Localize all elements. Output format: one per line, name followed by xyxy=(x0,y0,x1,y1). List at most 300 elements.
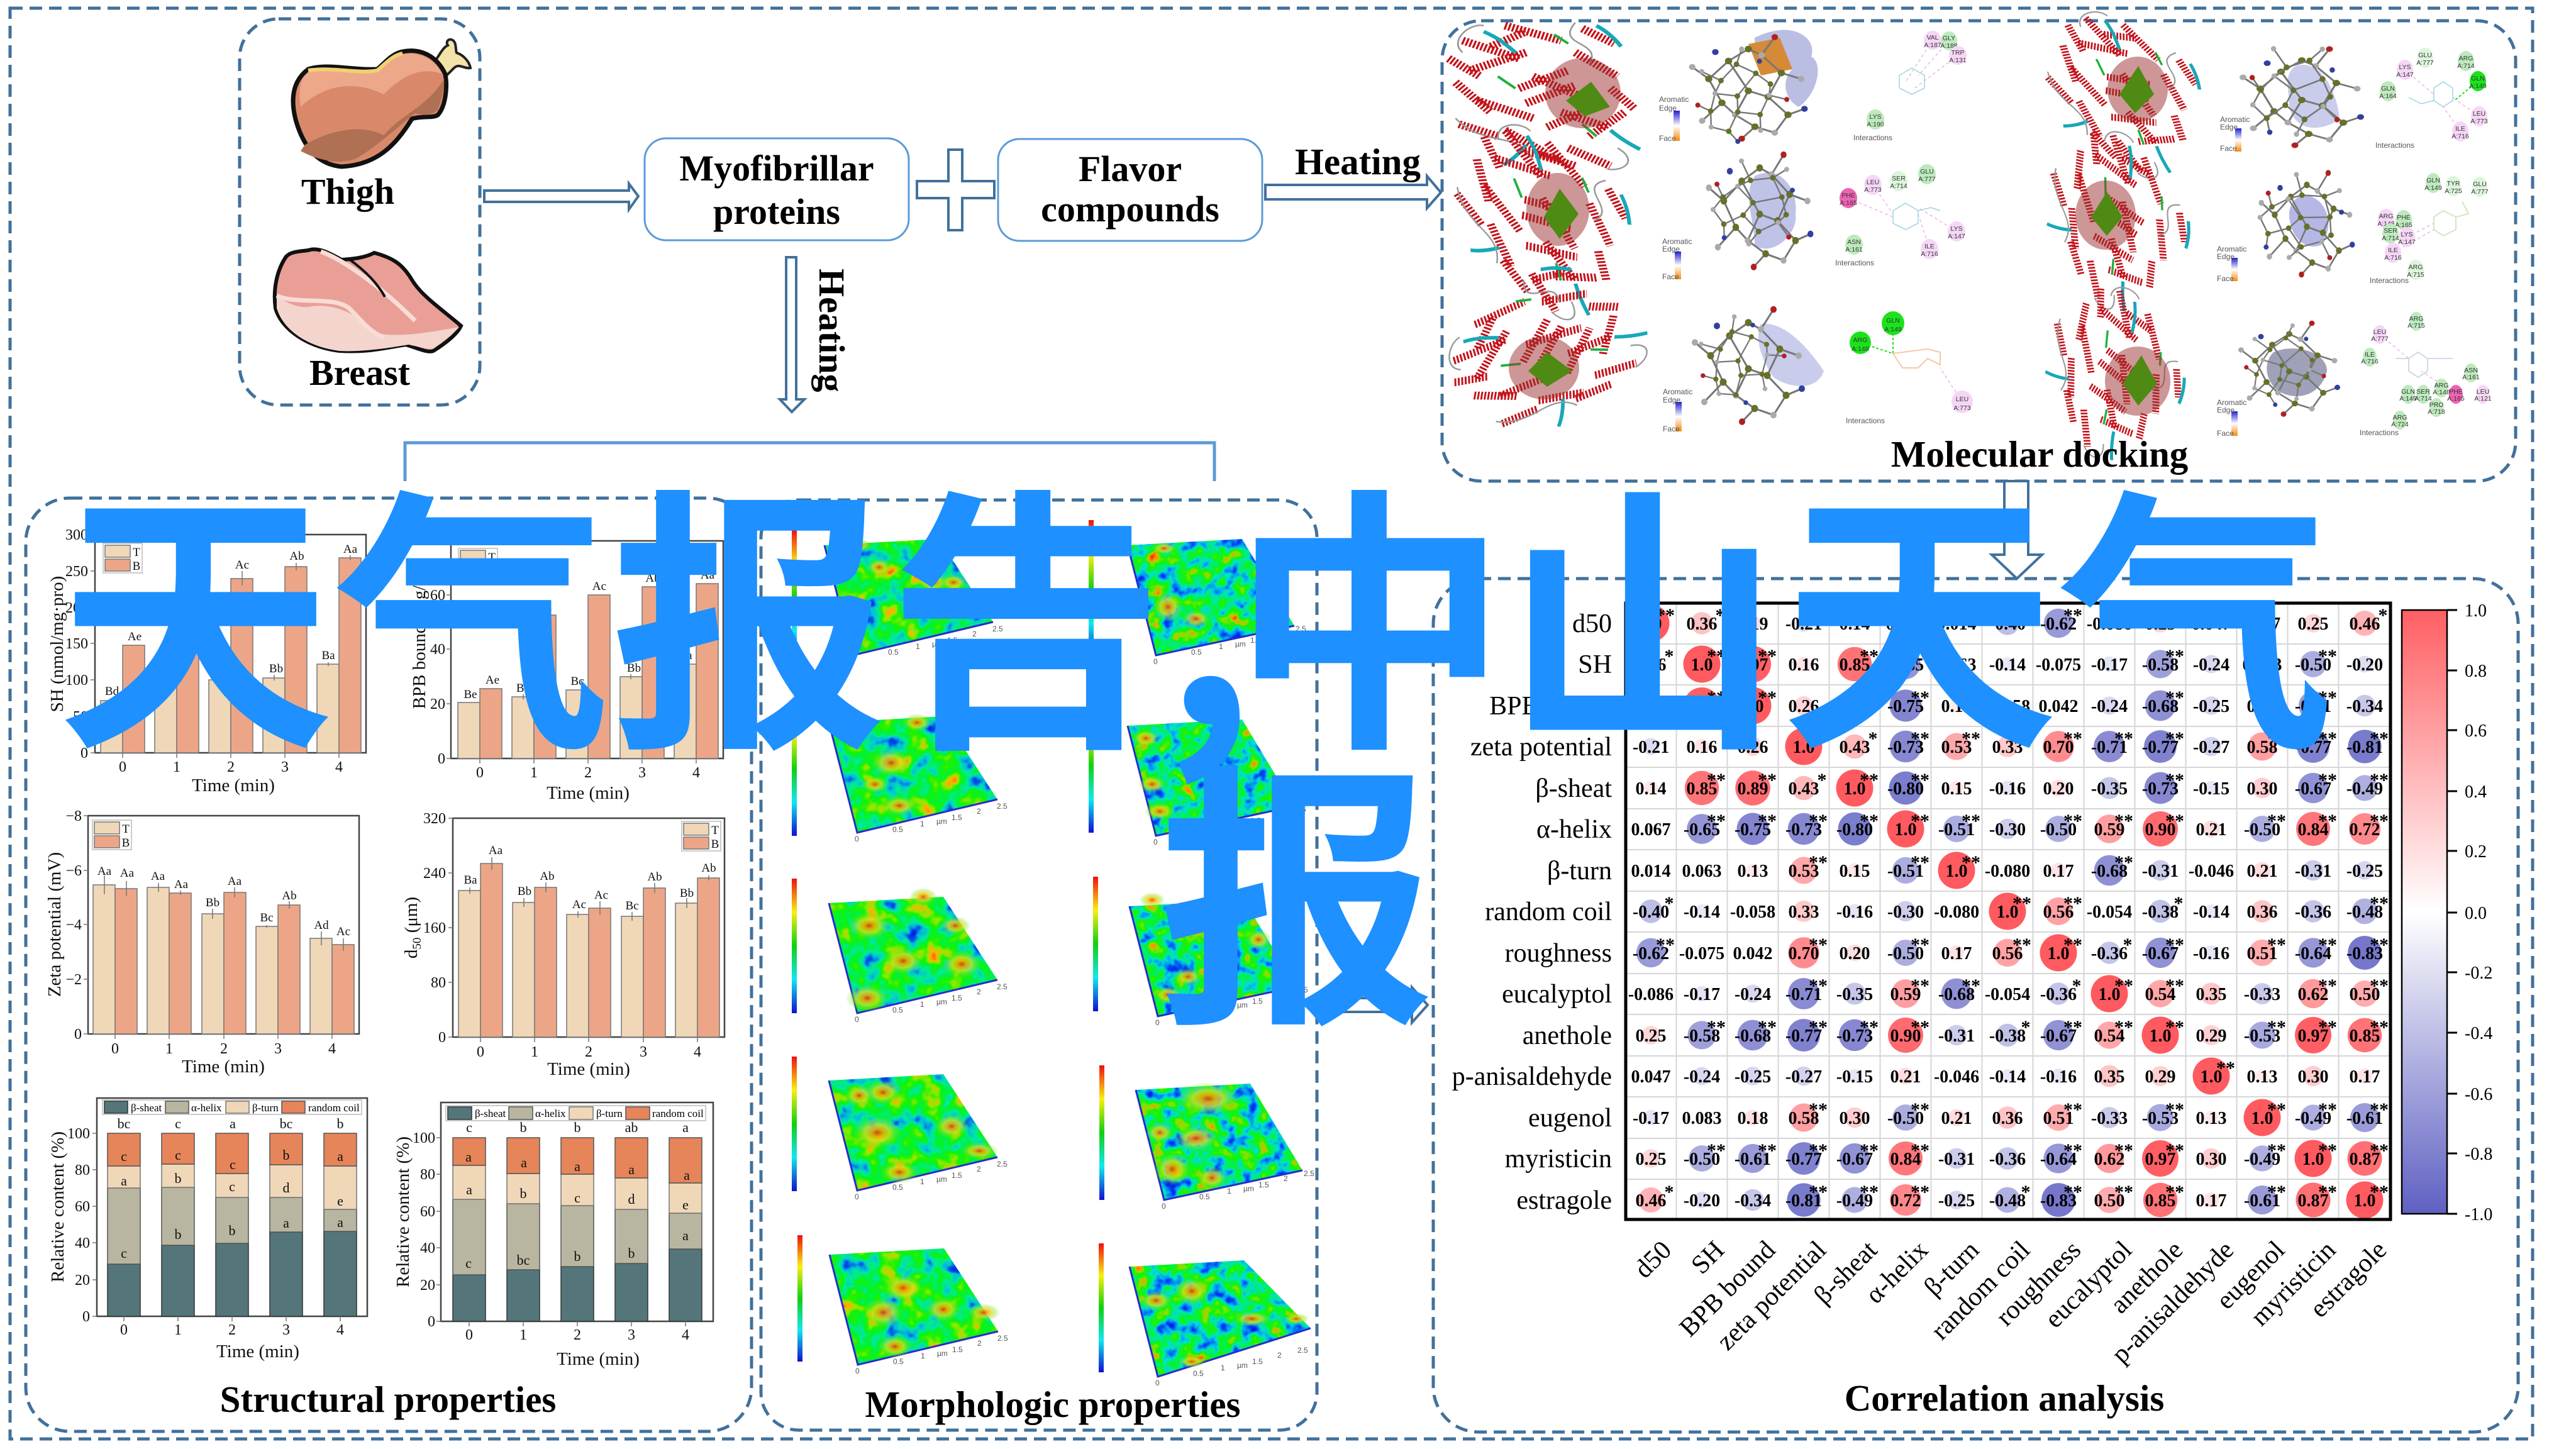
chart: secondary structure T: 2 xyxy=(228,1322,236,1338)
heatmap row: BPB bound: -0.25 xyxy=(2193,697,2229,716)
heatmap row: SH: ** xyxy=(1758,646,1777,667)
surface axis labels: 1.5 xyxy=(1250,636,1261,645)
heatmap row: anethole: ** xyxy=(2063,1017,2082,1038)
heatmap row: beta-turn: 0.063 xyxy=(1682,862,1722,881)
heatmap row: eucalyptol: * xyxy=(2072,975,2082,996)
heatmap row: zeta potential: -0.77 xyxy=(2295,738,2331,757)
heatmap row: SH: -0.17 xyxy=(2091,655,2128,675)
surface axis labels: 0.5 xyxy=(892,825,903,834)
heatmap row: d50: 0.19 xyxy=(1737,614,1768,634)
colour scale: aromatic edge face: Face xyxy=(2217,274,2234,283)
surface axis labels: µm xyxy=(1235,820,1246,829)
chart: SH: Bb xyxy=(269,662,283,675)
surface axis labels: 2.5 xyxy=(997,1160,1008,1169)
heatmap row: anethole: ** xyxy=(1911,1017,1929,1038)
heatmap row: alpha-helix: ** xyxy=(2165,811,2184,831)
heatmap row: eucalyptol: 0.50 xyxy=(2350,985,2380,1004)
heatmap row: zeta potential: ** xyxy=(1911,728,1929,749)
heatmap row: roughness: -0.62 xyxy=(1633,944,1669,963)
heatmap row: anethole: -0.31 xyxy=(1938,1026,1975,1046)
heatmap row: random coil: * xyxy=(1664,893,1674,914)
surface axis labels: 0 xyxy=(855,1367,860,1375)
chart: BPB bound: 0 xyxy=(476,765,484,781)
heatmap row: myristicin: -0.77 xyxy=(1785,1150,1822,1169)
chart: secondary structure B: 60 xyxy=(420,1204,435,1220)
heatmap row: SH: 0.16 xyxy=(1789,655,1819,675)
colour scale: aromatic edge face: Aromatic xyxy=(1663,387,1692,396)
heatmap row: d50: 0.36 xyxy=(1687,614,1717,634)
interaction diagrams: LYS xyxy=(2399,64,2411,71)
heatmap row: d50: 0.25 xyxy=(2298,614,2328,634)
heatmap row: zeta potential: -0.77 xyxy=(2142,738,2179,757)
interaction diagrams: A:190 xyxy=(1867,121,1884,128)
colour bar: -0.6 xyxy=(2465,1085,2492,1104)
surface axis labels: µm xyxy=(936,817,947,826)
surface axis labels: 2 xyxy=(1277,1351,1282,1360)
heatmap row: alpha-helix: -0.73 xyxy=(1785,820,1822,840)
heatmap row: eucalyptol: ** xyxy=(1911,975,1929,996)
column labels xyxy=(1629,1235,2392,1369)
heatmap row: roughness: -0.50 xyxy=(1887,944,1924,963)
row labels: p-anisaldehyde xyxy=(1452,1062,1612,1091)
heatmap row: p-anisaldehyde: -0.046 xyxy=(1934,1067,1979,1087)
interaction diagrams: A:149 xyxy=(1884,326,1902,333)
chart: SH: 150 xyxy=(65,636,88,652)
heatmap row: BPB bound: 0.042 xyxy=(2039,697,2078,716)
column labels: α-helix xyxy=(1860,1236,1934,1309)
surface axis labels: 1 xyxy=(920,1000,924,1009)
interaction diagrams: Interactions xyxy=(1846,416,1885,425)
surface axis labels: µm xyxy=(1235,640,1246,648)
heatmap row: alpha-helix: 0.21 xyxy=(2196,820,2226,840)
interaction diagrams: A:716 xyxy=(2384,254,2402,262)
interaction diagrams: GLN xyxy=(2381,85,2395,92)
row labels: SH xyxy=(1578,650,1612,679)
colour scale: aromatic edge face: Aromatic xyxy=(2217,245,2246,253)
interaction diagrams: PHE xyxy=(2449,388,2463,396)
heatmap row: eugenol: ** xyxy=(2165,1099,2184,1120)
heatmap row: SH xyxy=(1635,645,2383,683)
colour scale: aromatic edge face xyxy=(1659,95,2250,438)
heatmap row: estragole: 0.50 xyxy=(2094,1191,2124,1211)
heatmap row: roughness: ** xyxy=(2165,935,2184,955)
chart: secondary structure B: b xyxy=(574,1119,581,1135)
interaction diagrams: ARG xyxy=(2409,264,2423,271)
heatmap row: estragole: -0.34 xyxy=(1735,1191,1771,1211)
icon: thigh xyxy=(293,40,470,167)
surface axis labels: 2 xyxy=(1284,1174,1288,1183)
chart: SH: Bd xyxy=(105,685,119,698)
heatmap row: beta-turn: ** xyxy=(2114,852,2133,873)
chart: secondary structure T: a xyxy=(121,1173,127,1189)
heatmap row: myristicin: -0.64 xyxy=(2040,1150,2077,1169)
interaction diagrams: A:773 xyxy=(2470,118,2488,125)
panel: molecular docking xyxy=(1424,0,2516,481)
heatmap row: estragole: ** xyxy=(1809,1182,1828,1202)
heatmap row: random coil: -0.14 xyxy=(2193,902,2229,922)
heatmap row: alpha-helix: -0.65 xyxy=(1684,820,1720,840)
heatmap row: eucalyptol: -0.68 xyxy=(1938,985,1975,1004)
heatmap row: eugenol: 1.0 xyxy=(2251,1109,2273,1128)
heatmap row: BPB bound: 0.89 xyxy=(1839,697,1870,716)
heatmap row: beta-sheat: -0.49 xyxy=(2346,779,2383,799)
chart: d50: 320 xyxy=(423,811,446,827)
heatmap row: anethole: ** xyxy=(2165,1017,2184,1038)
interaction diagrams: A:147 xyxy=(1948,233,1965,240)
heatmap row: random coil: 1.0 xyxy=(1996,902,2019,922)
chart: zeta potential: B xyxy=(122,836,130,850)
heatmap row: d50: 0.14 xyxy=(1839,614,1870,634)
chart: d50: Ab xyxy=(647,870,662,884)
heatmap frame xyxy=(1626,603,2390,1219)
chart: SH: 200 xyxy=(65,600,88,616)
surface axis labels: 1.5 xyxy=(947,636,958,645)
heatmap row: random coil: ** xyxy=(2063,893,2082,914)
chart: SH: 0 xyxy=(119,759,126,775)
heatmap row: anethole: ** xyxy=(1860,1017,1879,1038)
arrow: to docking xyxy=(1265,176,1441,208)
interaction diagrams: GLN xyxy=(2471,75,2485,82)
heatmap row: SH: 0.97 xyxy=(1737,655,1768,675)
heatmap row: estragole: -0.81 xyxy=(1785,1191,1822,1211)
interaction diagrams: ARG xyxy=(2393,414,2407,421)
heatmap row: eucalyptol: ** xyxy=(1809,975,1828,996)
chart: SH: Ba xyxy=(321,649,335,662)
chart: BPB bound: Bb xyxy=(627,662,641,675)
heatmap row: roughness: ** xyxy=(2267,935,2286,955)
heatmap row: zeta potential: 0.33 xyxy=(1992,738,2023,757)
interaction diagrams: SER xyxy=(1892,175,1906,182)
heatmap row: BPB bound: 0.13 xyxy=(1941,697,1972,716)
interaction diagrams: A:714 xyxy=(2457,62,2475,70)
heatmap row: eugenol: ** xyxy=(2063,1099,2082,1120)
interaction diagrams: A:149 xyxy=(2424,184,2442,192)
heading: molecular docking: Molecular docking xyxy=(1891,433,2188,475)
heatmap row: p-anisaldehyde: -0.25 xyxy=(1735,1067,1771,1087)
heatmap row: BPB bound: ** xyxy=(2318,687,2337,708)
surface axis labels: 0 xyxy=(1162,1202,1166,1211)
heatmap row: alpha-helix: ** xyxy=(1809,811,1828,831)
interaction diagrams: A:777 xyxy=(2416,59,2434,67)
heatmap row: anethole: * xyxy=(2021,1017,2030,1038)
heatmap row: BPB bound: 0.19 xyxy=(1635,697,1667,716)
heatmap row: beta-sheat: ** xyxy=(2370,770,2389,791)
heatmap row: eugenol: -0.50 xyxy=(1887,1109,1924,1128)
interaction diagrams: A:724 xyxy=(2391,421,2409,428)
heatmap row: BPB bound: 0.18 xyxy=(2246,697,2278,716)
colour bar: 0.8 xyxy=(2465,662,2487,681)
heatmap row: random coil: -0.30 xyxy=(1887,902,1924,922)
ligand surfaces xyxy=(1682,30,2365,425)
heatmap row: beta-turn: 0.53 xyxy=(1789,862,1819,881)
chart: secondary structure B: β-turn xyxy=(596,1108,623,1119)
chart: d50: B xyxy=(711,838,719,851)
chart: d50: Aa xyxy=(489,844,503,857)
heatmap row: myristicin: ** xyxy=(2063,1140,2082,1161)
heatmap row: zeta potential: -0.27 xyxy=(2193,738,2229,757)
interaction diagrams: A:715 xyxy=(2407,322,2425,330)
heatmap row: p-anisaldehyde: 0.17 xyxy=(2350,1067,2380,1087)
heatmap row: BPB bound xyxy=(1635,687,2383,724)
column labels: d50 xyxy=(1629,1236,1677,1284)
heatmap row: SH: ** xyxy=(1860,646,1879,667)
interaction diagrams: ARG xyxy=(2434,382,2448,389)
chart: BPB bound: 0 xyxy=(438,751,445,767)
chart: secondary structure T: a xyxy=(337,1214,343,1230)
surface axis labels: 1 xyxy=(1227,1187,1231,1196)
heatmap row: myristicin: -0.31 xyxy=(1938,1150,1975,1169)
interaction diagrams: Interactions xyxy=(2360,428,2399,437)
heatmap row: alpha-helix: 0.067 xyxy=(1631,820,1670,840)
interaction diagrams: GLU xyxy=(2473,180,2487,188)
heatmap row: zeta potential: ** xyxy=(1962,728,1980,749)
surface axis labels: 0 xyxy=(1155,1018,1160,1027)
chart: secondary structure T: 1 xyxy=(174,1322,182,1338)
chart: BPB bound: 20 xyxy=(430,696,445,713)
chart: SH: 250 xyxy=(65,564,88,580)
heatmap row: beta-sheat: ** xyxy=(1707,770,1726,791)
heatmap row: estragole: 0.46 xyxy=(1635,1191,1667,1211)
heatmap row: myristicin: ** xyxy=(1809,1140,1828,1161)
heatmap row: eucalyptol: ** xyxy=(1962,975,1980,996)
chart: d50: 160 xyxy=(423,920,446,936)
heatmap row: BPB bound: -0.61 xyxy=(2295,697,2331,716)
box: flavor compounds: compounds xyxy=(1041,189,1219,230)
surface axis labels: 2 xyxy=(977,1339,982,1348)
column labels: β-sheat xyxy=(1809,1235,1883,1310)
interaction diagrams: A:165 xyxy=(2395,221,2412,229)
interaction diagrams: LYS xyxy=(1950,225,1963,233)
surface axis labels: 1.5 xyxy=(952,1171,962,1180)
icon: plus xyxy=(917,150,994,230)
interaction diagrams: ARG xyxy=(2379,213,2393,220)
heatmap row: BPB bound: -0.24 xyxy=(2091,697,2128,716)
heatmap row: d50: ** xyxy=(1656,605,1675,626)
heatmap row: random coil: -0.058 xyxy=(1730,902,1775,922)
heatmap row: beta-sheat: * xyxy=(1818,770,1826,791)
surface peaks xyxy=(844,539,1309,1368)
heatmap row: anethole: 0.25 xyxy=(1635,1026,1667,1046)
chart: zeta potential: T xyxy=(122,823,130,836)
chart: secondary structure B: 1 xyxy=(519,1327,527,1343)
chart: zeta potential: Time (min) xyxy=(182,1057,265,1077)
heatmap row: roughness: 1.0 xyxy=(2048,944,2069,963)
heatmap row: p-anisaldehyde: 0.30 xyxy=(2298,1067,2328,1087)
interaction diagrams: TYR xyxy=(2446,180,2460,187)
column labels: roughness xyxy=(1990,1236,2087,1332)
heatmap row: anethole: 0.90 xyxy=(1890,1026,1921,1046)
heatmap row: estragole: ** xyxy=(1860,1182,1879,1202)
panel: correlation analysis xyxy=(1433,579,2518,1432)
interaction diagrams: A:149 xyxy=(2469,82,2487,90)
chart: secondary structure B: 40 xyxy=(420,1240,435,1257)
chart: secondary structure B: 0 xyxy=(465,1327,473,1343)
chart: secondary structure T: c xyxy=(230,1157,236,1172)
heatmap row: eugenol: 0.58 xyxy=(1789,1109,1819,1128)
heatmap row: eucalyptol: -0.17 xyxy=(1684,985,1720,1004)
chart: secondary structure B: c xyxy=(465,1255,472,1271)
chart: d50 xyxy=(401,811,724,1079)
interaction diagrams: SER xyxy=(2416,388,2430,396)
heatmap row: p-anisaldehyde: 0.13 xyxy=(2246,1067,2278,1087)
heatmap row: d50: -0.21 xyxy=(1785,614,1822,634)
chart: secondary structure T: c xyxy=(121,1245,127,1261)
heatmap row: p-anisaldehyde: 0.047 xyxy=(1631,1067,1670,1087)
heatmap row: beta-turn: ** xyxy=(1911,852,1929,873)
interaction diagrams: A:716 xyxy=(2361,358,2379,365)
heatmap row: alpha-helix: ** xyxy=(1758,811,1777,831)
chart: BPB bound: 40 xyxy=(430,641,445,658)
heatmap row: beta-sheat: 0.15 xyxy=(1941,779,1972,799)
chart: d50: 80 xyxy=(431,975,446,991)
heatmap row: beta-sheat: 0.14 xyxy=(1635,779,1667,799)
heatmap row: beta-sheat: -0.80 xyxy=(1887,779,1924,799)
chart: secondary structure B: β-sheat xyxy=(475,1108,506,1119)
heatmap row: zeta potential: -0.71 xyxy=(2091,738,2128,757)
surface axis labels: 0 xyxy=(1153,657,1158,666)
heatmap row: zeta potential: ** xyxy=(2318,728,2337,749)
panel: raw materials xyxy=(240,19,480,405)
row labels xyxy=(1452,609,1612,1215)
heatmap row: zeta potential: ** xyxy=(2165,728,2184,749)
heatmap row: d50: 0.067 xyxy=(1885,614,1926,634)
interaction diagrams: Interactions xyxy=(2375,141,2414,150)
colour bar: 0.2 xyxy=(2465,842,2487,862)
surface axis labels: µm xyxy=(937,1349,948,1358)
chart: d50: 0 xyxy=(438,1030,446,1046)
heatmap row: eucalyptol: -0.086 xyxy=(1628,985,1674,1004)
chart: secondary structure B: 80 xyxy=(420,1167,435,1183)
interaction diagrams: A:773 xyxy=(1953,404,1971,412)
watermark overlay: 天气报告,中山天气 xyxy=(57,404,2334,805)
heatmap row: anethole: -0.68 xyxy=(1735,1026,1771,1046)
chart: zeta potential: 3 xyxy=(274,1041,282,1057)
heatmap row: myristicin: -0.36 xyxy=(1989,1150,2026,1169)
chart: BPB bound: BPB bound (mg/g) xyxy=(409,570,430,709)
chart: secondary structure B: a xyxy=(574,1158,580,1174)
chart: BPB bound: Ae xyxy=(486,674,499,687)
chart: d50: d xyxy=(401,950,421,958)
surface axis labels: 1 xyxy=(920,819,924,828)
heatmap row: SH: ** xyxy=(2165,646,2184,667)
chart: d50: Ab xyxy=(701,862,716,875)
chart: secondary structure B: 4 xyxy=(682,1327,689,1343)
bracket xyxy=(405,443,1214,481)
heatmap row: SH: -0.075 xyxy=(2036,655,2081,675)
chart: d50: T xyxy=(711,824,719,837)
heatmap row: p-anisaldehyde: -0.24 xyxy=(1684,1067,1720,1087)
surface axis labels: 1 xyxy=(916,642,920,651)
heatmap row: anethole: 0.97 xyxy=(2298,1026,2328,1046)
chart: secondary structure T: bc xyxy=(118,1116,131,1131)
surface axis labels: 1 xyxy=(921,1352,925,1360)
colour scale: aromatic edge face: Edge xyxy=(2217,252,2235,261)
heatmap row: p-anisaldehyde: -0.16 xyxy=(2040,1067,2077,1087)
chart: zeta potential: Zeta potential (mV) xyxy=(45,852,65,997)
heatmap row: roughness: -0.67 xyxy=(2142,944,2179,963)
heatmap row: zeta potential: 0.58 xyxy=(2246,738,2278,757)
heatmap row: beta-turn: ** xyxy=(1962,852,1980,873)
chart: d50: 2 xyxy=(585,1044,592,1060)
chart: secondary structure T: 40 xyxy=(75,1235,90,1252)
heatmap row: zeta potential: 0.26 xyxy=(1737,738,1768,757)
chart: secondary structure B: bc xyxy=(517,1252,530,1268)
chart: secondary structure T: 60 xyxy=(75,1199,90,1215)
heatmap row: roughness: 0.042 xyxy=(1733,944,1772,963)
chart: secondary structure B: c xyxy=(466,1119,472,1135)
interaction diagrams: ILE xyxy=(2365,351,2375,358)
surface axis labels: 1.5 xyxy=(952,813,962,822)
interaction diagrams: A:714 xyxy=(1890,182,1907,190)
heatmap row: random coil: * xyxy=(2174,893,2184,914)
heatmap row: random coil: 0.33 xyxy=(1789,902,1819,922)
interaction diagrams: ILE xyxy=(1924,243,1935,250)
heatmap row: random coil: -0.38 xyxy=(2142,902,2179,922)
heatmap row: eucalyptol: 0.62 xyxy=(2298,985,2328,1004)
heatmap row: zeta potential: 0.16 xyxy=(1687,738,1717,757)
heatmap row: estragole: ** xyxy=(2063,1182,2082,1202)
heatmap row: beta-sheat: 0.20 xyxy=(2043,779,2074,799)
heatmap row: alpha-helix: ** xyxy=(1860,811,1879,831)
interaction diagrams: A:161 xyxy=(1845,246,1863,253)
heatmap row: d50: -0.62 xyxy=(2040,614,2077,634)
heatmap row: roughness: ** xyxy=(2012,935,2031,955)
heatmap row: roughness: ** xyxy=(2318,935,2337,955)
heatmap row: eugenol: 0.083 xyxy=(1682,1109,1722,1128)
column labels: eugenol xyxy=(2211,1236,2290,1315)
chart: secondary structure T: a xyxy=(337,1148,343,1164)
row labels: random coil xyxy=(1485,897,1612,926)
chart: secondary structure B: a xyxy=(466,1182,472,1197)
heatmap row: alpha-helix xyxy=(1631,810,2389,848)
chart: SH: 50 xyxy=(73,709,88,725)
chart: SH: 0 xyxy=(80,745,88,762)
surface axis labels: 2.5 xyxy=(1296,805,1306,814)
colour bar xyxy=(2402,601,2492,1224)
arrow label: heating right: Heating xyxy=(1295,141,1421,182)
heatmap row: beta-turn: -0.51 xyxy=(1887,862,1924,881)
heatmap row: beta-turn: -0.31 xyxy=(2295,862,2331,881)
surface axis labels: 1.5 xyxy=(1252,1357,1263,1366)
heatmap row: d50 xyxy=(1633,605,2387,641)
interaction diagrams: GLU xyxy=(1920,168,1934,175)
surface axis labels: 0 xyxy=(850,657,855,666)
chart: secondary structure B: b xyxy=(628,1245,635,1261)
heatmap row: myristicin: 0.62 xyxy=(2094,1150,2124,1169)
column labels: β-turn xyxy=(1919,1236,1985,1302)
heatmap row: beta-turn: -0.31 xyxy=(2142,862,2179,881)
heading: correlation analysis: Correlation analysis xyxy=(1845,1377,2164,1419)
colour bar: -1.0 xyxy=(2465,1205,2492,1224)
heatmap row: roughness: -0.83 xyxy=(2346,944,2383,963)
chart: zeta potential: Bc xyxy=(260,911,274,924)
interaction diagrams: A:714 xyxy=(2414,395,2432,402)
heatmap row: estragole: -0.20 xyxy=(1684,1191,1720,1211)
surface axis labels: 0.5 xyxy=(1193,1009,1204,1018)
interaction diagrams: A:164 xyxy=(2379,92,2397,100)
interaction diagrams: A:188 xyxy=(1940,42,1958,50)
interaction diagrams: ARG xyxy=(2409,315,2423,323)
interaction diagrams: ASN xyxy=(2464,367,2478,374)
chart: BPB bound: 60 xyxy=(430,587,445,604)
heatmap row: SH: -0.14 xyxy=(1989,655,2026,675)
surface axis labels: µm xyxy=(936,997,947,1006)
column labels: anethole xyxy=(2105,1236,2189,1319)
surface axis labels: 2.5 xyxy=(997,802,1008,811)
heatmap row: BPB bound: 0.97 xyxy=(1687,697,1717,716)
heatmap row: myristicin: -0.61 xyxy=(1735,1150,1771,1169)
chart: secondary structure T: d xyxy=(283,1180,289,1196)
